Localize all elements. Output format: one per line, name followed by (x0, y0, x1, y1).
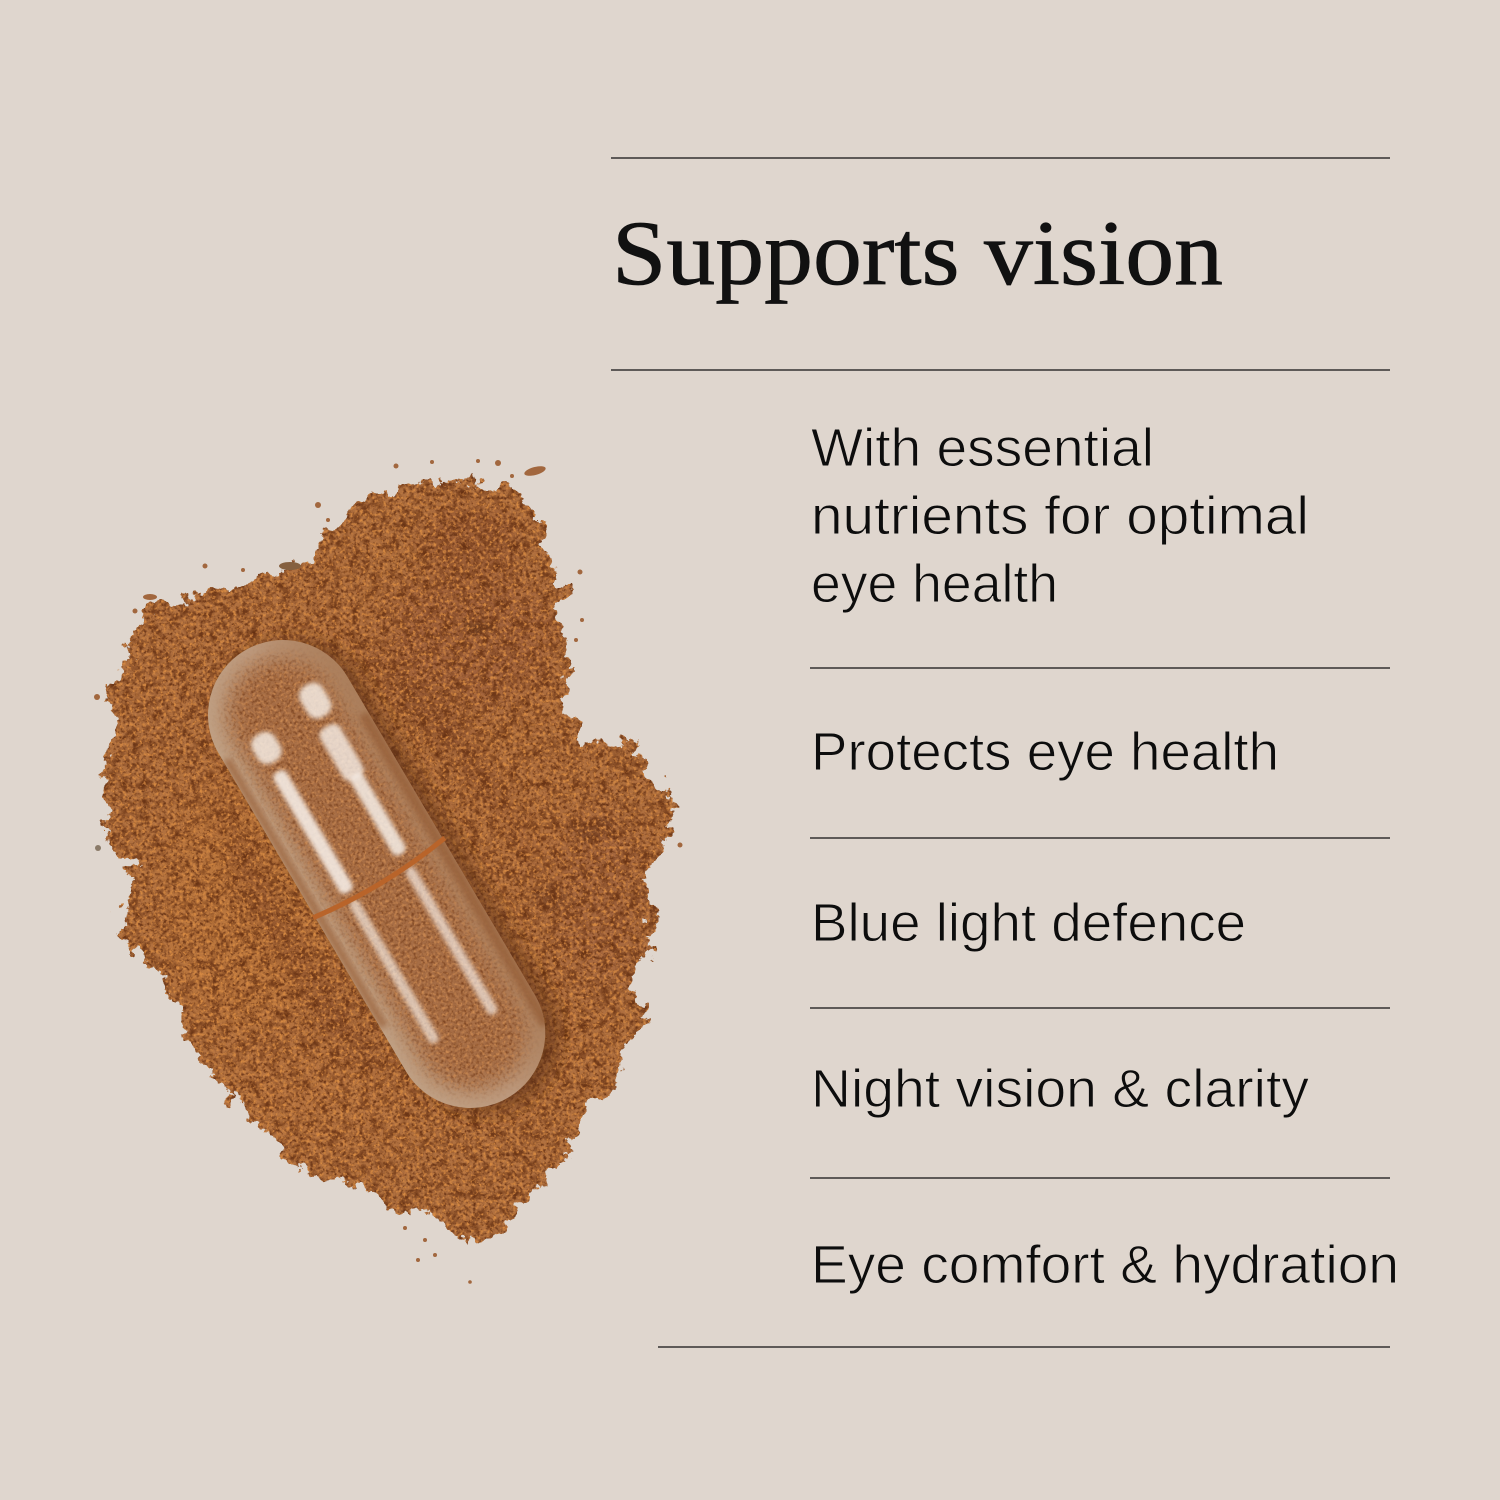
benefit 1: essential nutrients (811, 418, 1309, 614)
benefit 2: protects eye health: Protects eye health (811, 722, 1279, 782)
photo: powder pile with capsule (94, 459, 682, 1284)
benefit 3: blue light defence: Blue light defence (811, 893, 1246, 953)
rule below title (611, 369, 1390, 371)
capsule body (208, 640, 546, 1108)
infographic canvas (94, 157, 1395, 1348)
title: Supports vision (612, 202, 1223, 304)
capsule seam (312, 838, 448, 922)
highlight streak left (247, 728, 450, 1048)
benefit 5: eye comfort and hydration: Eye comfort & hydration (811, 1235, 1399, 1295)
capsule shadow (191, 611, 588, 1141)
benefit 1: essential nutrients: nutrients for optimal (811, 486, 1309, 546)
benefit 4: night vision and clarity: Night vision & clarity (811, 1059, 1309, 1119)
benefit 1: essential nutrients: eye health (811, 554, 1058, 614)
loose powder specks (94, 459, 682, 1284)
benefit 1: essential nutrients: With essential (811, 418, 1154, 478)
rule above title (611, 157, 1390, 159)
powder pile (104, 480, 672, 1244)
capsule (208, 631, 568, 1122)
highlight streak right (293, 679, 510, 1019)
